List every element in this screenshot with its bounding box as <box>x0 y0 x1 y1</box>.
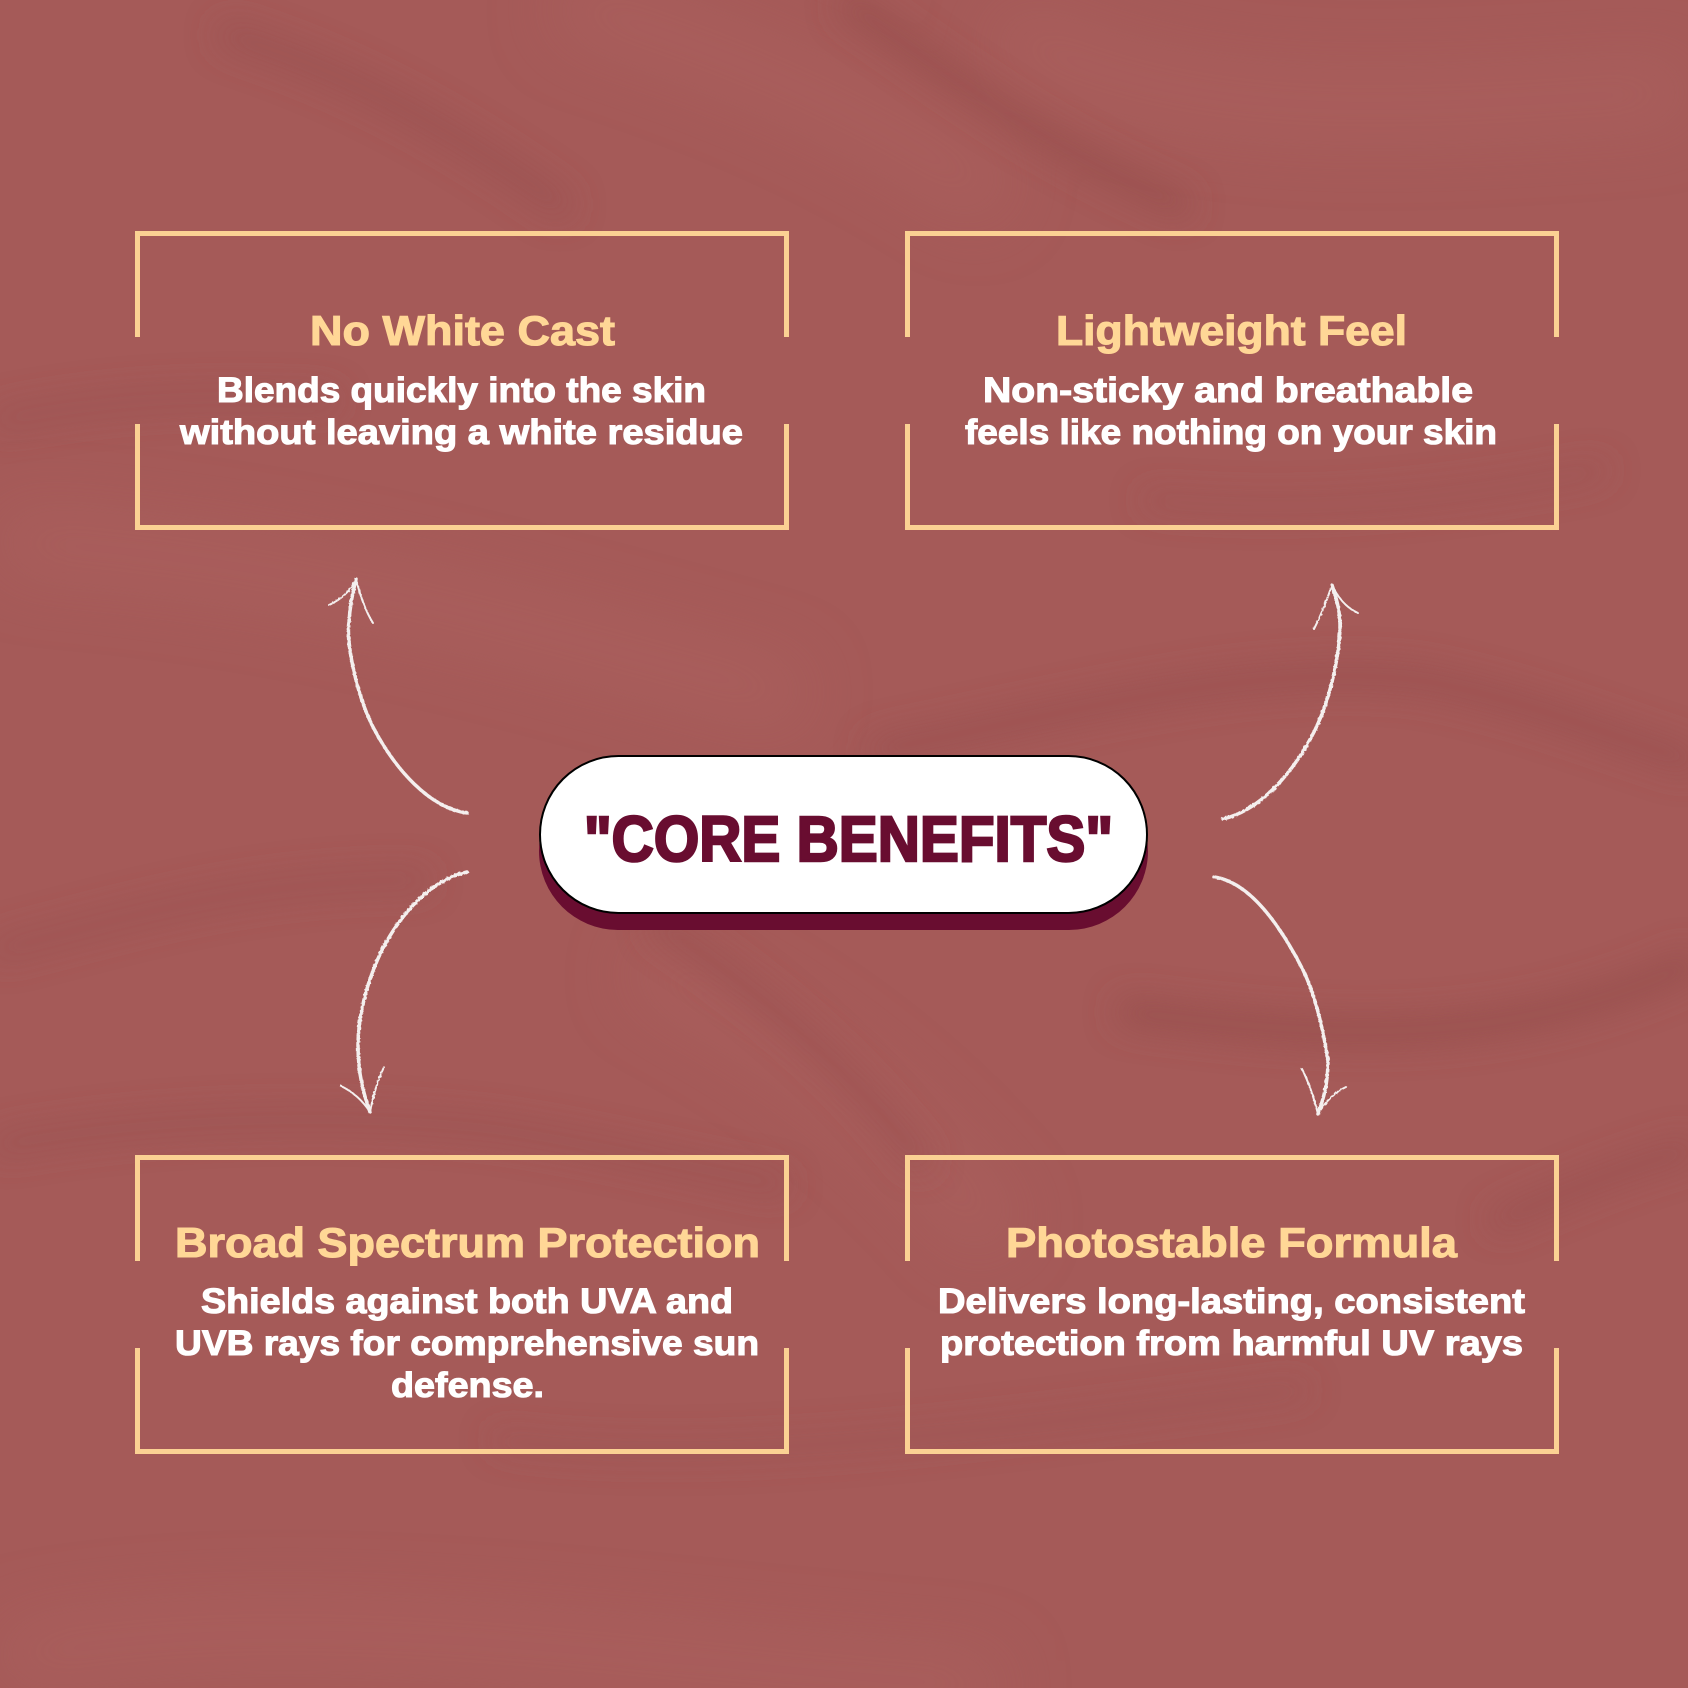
frame: No White Cast <box>138 234 786 528</box>
text: Lightweight Feel description: Non-sticky and breathable <box>983 371 1473 410</box>
text: Broad Spectrum Protection description: UVB rays for comprehensive sun <box>175 1324 759 1363</box>
frame: Photostable Formula <box>908 1158 1556 1452</box>
arrow: to Photostable Formula <box>1214 877 1346 1114</box>
heading: No White Cast: No White Cast <box>310 307 615 354</box>
text: Lightweight Feel description: feels like nothing on your skin <box>965 413 1497 452</box>
text: No White Cast description: without leaving a white residue <box>179 413 743 452</box>
text: Photostable Formula description: protection from harmful UV rays <box>940 1324 1523 1363</box>
center pill: Core Benefits <box>539 756 1148 930</box>
panel: Broad Spectrum Protection <box>138 1158 786 1452</box>
text: Broad Spectrum Protection description: defense. <box>391 1366 544 1405</box>
frame: Lightweight Feel <box>908 234 1556 528</box>
text: Photostable Formula description <box>938 1282 1525 1363</box>
panel: Lightweight Feel <box>908 234 1556 528</box>
heading: Photostable Formula: Photostable Formula <box>1006 1219 1458 1266</box>
arrow: to Lightweight Feel <box>1223 585 1358 819</box>
frame: Broad Spectrum Protection <box>138 1158 786 1452</box>
pill title: "CORE BENEFITS" <box>584 803 1113 875</box>
pill body <box>540 756 1147 913</box>
heading: Lightweight Feel: Lightweight Feel <box>1056 307 1407 354</box>
arrow: to Broad Spectrum Protection <box>341 872 467 1112</box>
pill shadow <box>539 772 1148 930</box>
heading: Broad Spectrum Protection: Broad Spectrum Protection <box>175 1219 760 1266</box>
arrow: to No White Cast <box>329 579 467 813</box>
panel: No White Cast <box>138 234 786 528</box>
text: No White Cast description <box>179 371 743 452</box>
text: Broad Spectrum Protection description: Shields against both UVA and <box>201 1282 733 1321</box>
text: Broad Spectrum Protection description <box>175 1282 759 1405</box>
panel: Photostable Formula <box>908 1158 1556 1452</box>
text: Lightweight Feel description <box>965 371 1497 452</box>
text: Photostable Formula description: Delivers long-lasting, consistent <box>938 1282 1525 1321</box>
text: No White Cast description: Blends quickly into the skin <box>217 371 706 410</box>
